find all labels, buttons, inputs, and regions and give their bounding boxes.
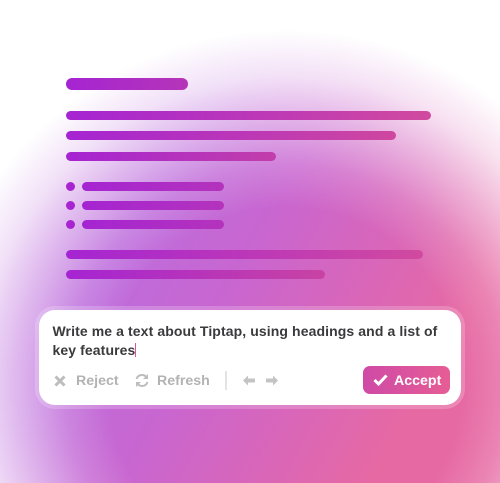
- icon: back arrow: [243, 376, 255, 386]
- prompt text: Write me a text about Tiptap, using headings and a list of: [52, 323, 437, 339]
- reject label: Reject: [76, 373, 119, 389]
- refresh label: Refresh: [157, 373, 210, 389]
- prompt panel: [39, 310, 461, 405]
- text cursor: [135, 343, 136, 357]
- list line 3: [82, 220, 224, 229]
- icon: forward arrow: [266, 376, 278, 386]
- accept button: [363, 366, 450, 394]
- icon: check: [374, 374, 388, 386]
- icon: reject cross: [54, 376, 66, 386]
- bullet 3: [66, 220, 75, 229]
- bullet 1: [66, 182, 75, 191]
- paragraph line 2: [66, 131, 396, 140]
- accept label: Accept: [394, 373, 441, 389]
- paragraph line 1: [66, 111, 431, 120]
- paragraph line 5: [66, 270, 325, 279]
- paragraph line 3: [66, 152, 276, 161]
- prompt text: key features: [52, 342, 135, 358]
- icon: refresh: [136, 374, 148, 387]
- bullet 2: [66, 201, 75, 210]
- toolbar divider: [225, 371, 226, 390]
- paragraph line 4: [66, 250, 423, 259]
- heading bar: [66, 78, 188, 90]
- list line 2: [82, 201, 224, 210]
- document skeleton: [66, 78, 431, 279]
- list line 1: [82, 182, 224, 191]
- prompt text: [52, 323, 438, 358]
